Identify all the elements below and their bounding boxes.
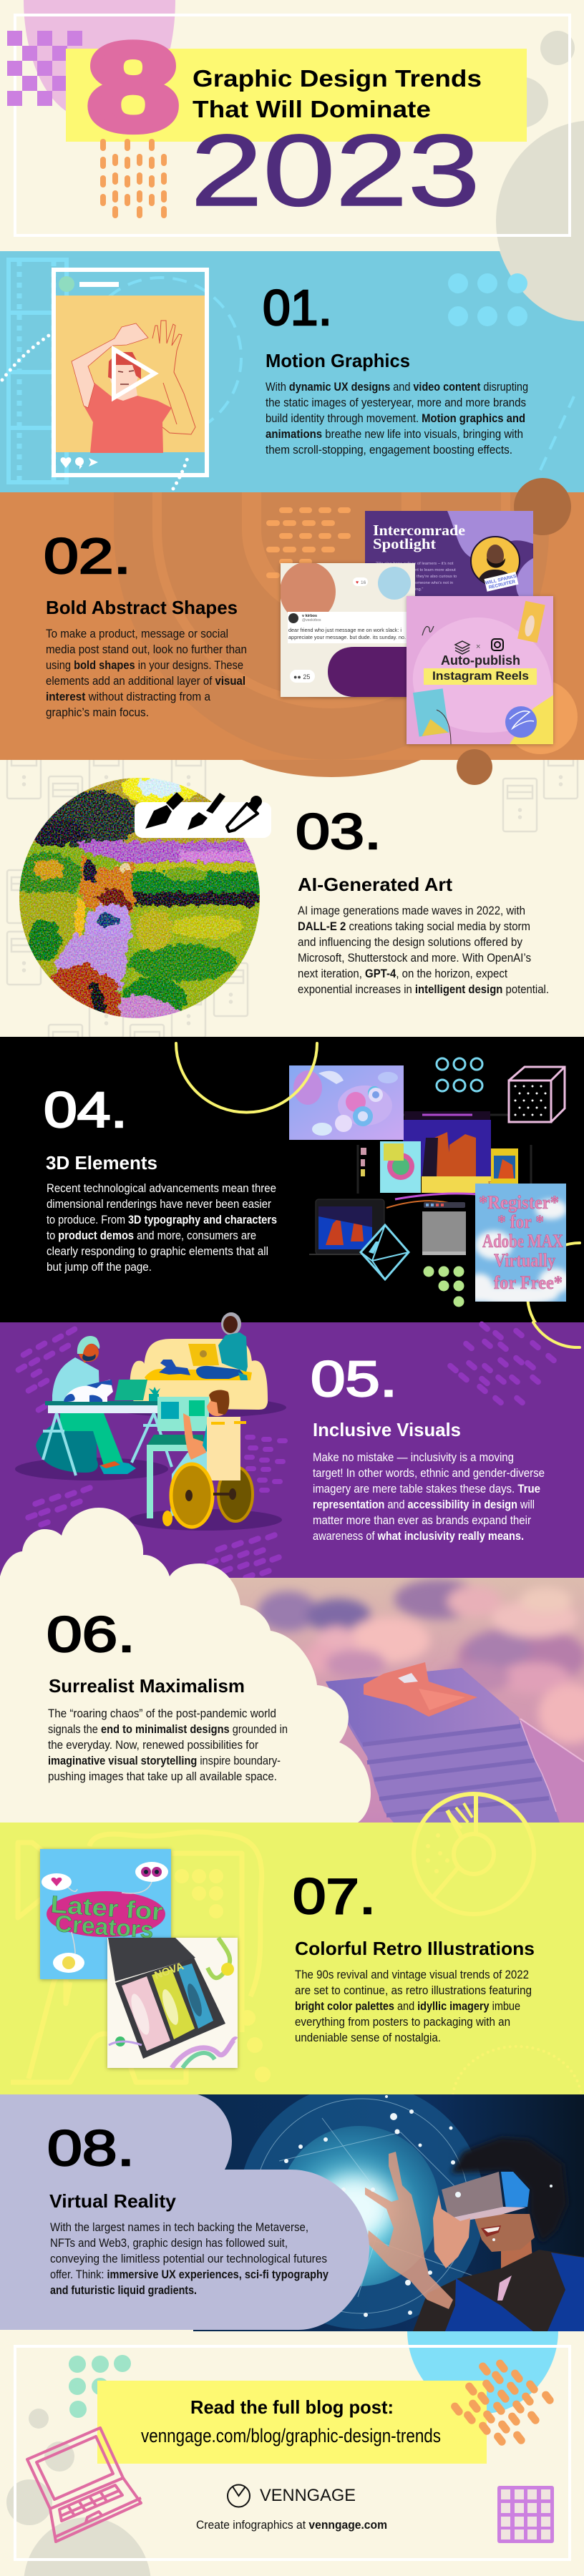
- portrait: [471, 537, 520, 592]
- orange dashes: [449, 2358, 555, 2447]
- body text: NFTs and Web3, graphic design has followed suit,: [50, 2236, 288, 2250]
- body text: graphic’s main focus.: [46, 706, 149, 719]
- yellow band: [97, 2381, 487, 2464]
- body text: animations breathe new life into visuals, bringing with: [266, 427, 523, 441]
- pink meadow band: [79, 841, 265, 866]
- headset: [442, 2172, 503, 2218]
- body text: clearly responding to graphic elements that all: [47, 1244, 268, 1258]
- laptop: [309, 1199, 395, 1254]
- body text: the static images of yesteryear, more and more brands: [266, 396, 526, 409]
- body text: to produce. From 3D typography and characters: [47, 1213, 277, 1226]
- big number 8: 8: [87, 18, 179, 156]
- face and neck: [501, 2240, 533, 2279]
- orange dash pattern: [100, 139, 167, 218]
- title: That Will Dominate: [193, 96, 431, 122]
- poster: Register for Adobe MAX: Adobe MAX: [482, 1231, 563, 1252]
- panel: 04 3D elements: [0, 1037, 584, 1347]
- retro background outlines: [11, 1832, 262, 2082]
- heading: AI-Generated Art: [298, 874, 452, 895]
- green laptop: [115, 1380, 147, 1400]
- icon: pen nib: [145, 792, 184, 829]
- body text: everything from posters to packaging with an: [295, 2015, 510, 2029]
- body text: imagery are mere table stakes these days. True: [313, 1482, 540, 1496]
- number: 02.: [44, 528, 131, 584]
- dotted arc: [453, 2046, 581, 2094]
- body text: next iteration, GPT-4, on the horizon, expect: [298, 967, 507, 980]
- number: 04.: [44, 1082, 127, 1138]
- card: tweet post: [280, 562, 415, 697]
- monitor: [157, 1397, 209, 1439]
- body text: Make no mistake — inclusivity is a moving: [313, 1450, 514, 1464]
- poster: cosmetics box: NOVA: [153, 1960, 185, 1982]
- raised hands: [365, 2152, 470, 2309]
- wire diamond: [361, 1225, 409, 1279]
- body text: AI image generations made waves in 2022, with: [298, 904, 525, 917]
- icon: purple grid: [497, 2486, 554, 2543]
- card: tweet post: ●● 25: [293, 673, 310, 680]
- plant: [149, 1387, 160, 1401]
- body text: [46, 627, 247, 719]
- body text: target! In other words, ethnic and gender-diverse: [313, 1466, 545, 1480]
- white frame: [15, 2346, 570, 2560]
- poster: Register for Adobe MAX: for Free*: [494, 1272, 563, 1293]
- body text: media post stand out, look no further than: [46, 643, 247, 656]
- card: Auto-publish Instagram Reels: ×: [476, 643, 480, 651]
- card: tweet post: appreciate your message. but dude. its sunday. no.: [288, 634, 406, 640]
- panel: 01 motion graphics: [0, 251, 584, 493]
- desk: [43, 1401, 172, 1475]
- heading: Colorful Retro Illustrations: [295, 1938, 535, 1959]
- mint dots: [69, 2355, 131, 2418]
- body text: matter more than ever as brands expand their: [313, 1513, 531, 1527]
- body text: and futuristic liquid gradients.: [50, 2283, 197, 2297]
- card: Intercomrade Spotlight: omeone who’s not in: [415, 581, 453, 585]
- number: 07.: [293, 1868, 376, 1924]
- year 2023: 2023: [190, 114, 480, 228]
- checker pattern: [7, 31, 82, 106]
- title: Graphic Design Trends: [193, 65, 482, 92]
- card: Intercomrade Spotlight: [365, 511, 533, 596]
- number: 08.: [47, 2120, 135, 2176]
- brown circles: [457, 478, 571, 785]
- body text: Microsoft, Shutterstock and more. With OpenAI’s: [298, 951, 531, 965]
- wheelchair person: [162, 1390, 253, 1527]
- network dots: [284, 2095, 553, 2317]
- body text: are set to continue, as retro illustrations featuring: [295, 1984, 532, 1997]
- card: Intercomrade Spotlight: ing.”: [415, 587, 423, 592]
- green dots: [424, 1267, 464, 1307]
- post action icons: [61, 457, 98, 469]
- body text: exponential increases in intelligent design potential.: [298, 982, 549, 996]
- card: Intercomrade Spotlight: “We also hope culture of learners – it’s not: [376, 562, 454, 566]
- dog: [159, 1360, 190, 1375]
- body text: build identity through movement. Motion graphics and: [266, 411, 525, 425]
- illustrated man: [72, 321, 195, 453]
- concentric rings: [114, 492, 549, 777]
- stacked bed steps: [521, 1720, 584, 1796]
- panel: 08 virtual reality: [0, 2083, 584, 2331]
- orange dashes: [266, 507, 351, 578]
- woman hair: [451, 2137, 568, 2243]
- white frame: [15, 15, 570, 235]
- body text: DALL-E 2 creations taking social media by storm: [298, 919, 530, 933]
- lower grass: [128, 903, 259, 1010]
- left foliage: [19, 850, 82, 894]
- body text: representation and accessibility in design will: [313, 1498, 535, 1511]
- panel: 06 surrealist maximalism: [0, 1508, 584, 1823]
- heading: Surrealist Maximalism: [49, 1675, 245, 1697]
- heading: Virtual Reality: [49, 2190, 177, 2212]
- portrait: RECRUITER: [488, 580, 516, 590]
- heading: Motion Graphics: [266, 350, 410, 371]
- number: 03.: [296, 804, 381, 859]
- retro dots: [175, 1869, 271, 2082]
- body text: elements add an additional layer of visual: [46, 674, 245, 688]
- poster: Later for Creators: [40, 1849, 171, 1979]
- card: tweet post: ♥: [356, 580, 359, 585]
- body text: [313, 1450, 545, 1543]
- pink semicircle: [24, 0, 175, 122]
- monitor composite: EMERGING: [488, 1180, 517, 1186]
- purple dash patterns: [14, 1320, 558, 1581]
- body text: imaginative visual storytelling inspire boundary-: [48, 1754, 281, 1767]
- lilac text shape: [0, 2094, 369, 2330]
- avatar: [59, 276, 74, 292]
- cat: [64, 1380, 113, 1402]
- 3D image: [289, 1065, 404, 1140]
- tool icons card: [135, 792, 271, 838]
- illustration: remote workers: [15, 1312, 286, 1531]
- body text: pushing images that take up all available space.: [48, 1770, 277, 1783]
- poster: Later for Creators: Creators: [54, 1910, 155, 1943]
- pink bed: [364, 1662, 477, 1717]
- body text: [298, 904, 549, 996]
- card: Intercomrade Spotlight: they’re also curious to: [417, 575, 457, 579]
- fox: [79, 855, 136, 916]
- wire cube: [509, 1067, 565, 1122]
- cloud shape: [0, 1508, 371, 1823]
- body text: using bold shapes in your designs. These: [46, 658, 243, 672]
- call to action: [141, 2396, 441, 2446]
- sofa person: [188, 1312, 248, 1380]
- exercise ball: [36, 1415, 98, 1473]
- blue semicircle: [407, 2331, 558, 2414]
- card: tweet post: v kirbos: [302, 614, 317, 618]
- dotted lines: [2, 336, 188, 489]
- dots: [448, 273, 527, 326]
- small desk: [147, 1435, 203, 1518]
- body text: and influencing the design solutions offered by: [298, 935, 522, 949]
- body text: [266, 380, 528, 457]
- light orange circle: [503, 680, 578, 754]
- card: tweet post: 16: [361, 580, 366, 585]
- yellow title band: [66, 49, 527, 142]
- yellow arc: [176, 1043, 317, 1112]
- big cream circle corner: [500, 251, 584, 321]
- grey background ellipses: [491, 31, 584, 322]
- title: [193, 65, 482, 122]
- frame: [54, 270, 207, 475]
- dark band: [134, 892, 259, 905]
- body text: The “roaring chaos” of the post-pandemic world: [48, 1707, 276, 1720]
- body text: them scroll-stopping, engagement boosting effects.: [266, 443, 512, 457]
- poster: Later for Creators: Later for: [49, 1891, 164, 1926]
- number: 06.: [47, 1606, 135, 1662]
- grey circles: [6, 2409, 151, 2576]
- body text: signals the end to minimalist designs grounded in: [48, 1722, 288, 1736]
- credit: Create infographics at venngage.com: [196, 2518, 387, 2532]
- icon: dropper: [227, 796, 262, 831]
- yellow arc right: [527, 1243, 580, 1347]
- body text: conveying the limitless potential our technological futures: [50, 2252, 327, 2265]
- body text: [295, 1968, 532, 2044]
- film strip: [9, 260, 67, 482]
- poster: Register for Adobe MAX: [475, 1184, 566, 1302]
- panel: 03 AI-generated art: [6, 760, 578, 1037]
- icon: brush: [188, 793, 225, 830]
- body text: offer. Think: immersive UX experiences, sci-fi typography: [50, 2268, 328, 2281]
- monitor composite: [358, 1111, 531, 1255]
- card: tweet post: @veekirbos: [302, 618, 321, 623]
- number: 05.: [311, 1351, 397, 1407]
- call to action: venngage.com/blog/graphic-design-trends: [141, 2425, 441, 2446]
- panel: 05 inclusive visuals: [0, 1312, 584, 1581]
- sofa: [130, 1339, 268, 1410]
- number: 01.: [263, 280, 332, 336]
- body text: Recent technological advancements mean three: [47, 1181, 276, 1195]
- card: Intercomrade Spotlight: Spotlight: [373, 535, 436, 552]
- body text: [48, 1707, 288, 1783]
- body text: With the largest names in tech backing the Metaverse,: [50, 2220, 308, 2234]
- upper right grass: [131, 862, 265, 874]
- Venngage logo: [228, 2484, 356, 2507]
- panel: 07 colorful retro illustrations: [0, 1794, 584, 2094]
- floor shadows: [15, 1397, 286, 1531]
- icon: pink laptop: [27, 2428, 141, 2542]
- poster: cosmetics box: [107, 1938, 238, 2068]
- surreal photo: [215, 1578, 584, 1823]
- poster: Register for Adobe MAX: *Register*: [479, 1192, 559, 1213]
- desk man: [52, 1336, 136, 1474]
- play icon: [114, 349, 155, 398]
- VR photo: [193, 2083, 584, 2331]
- card: Auto-publish Instagram Reels: Instagram Reels: [432, 669, 529, 683]
- body text: To make a product, message or social: [46, 627, 228, 640]
- card: tweet post: dear friend who just message me on work slack: i: [288, 627, 402, 633]
- heading: Bold Abstract Shapes: [46, 597, 238, 618]
- heading: Inclusive Visuals: [313, 1419, 461, 1440]
- body text: awareness of what inclusivity really means.: [313, 1529, 524, 1543]
- card: Intercomrade Spotlight: nt to learn more about: [415, 568, 456, 572]
- card: Intercomrade Spotlight: Intercomrade: [373, 522, 465, 539]
- panel: footer: [0, 2331, 584, 2576]
- CD icon: [414, 1794, 534, 1914]
- heading: 3D Elements: [46, 1152, 157, 1174]
- social post illustration: [54, 270, 207, 475]
- body text: interest without distracting from a: [46, 690, 210, 703]
- body text: The 90s revival and vintage visual trends of 2022: [295, 1968, 529, 1981]
- body text: to product demos and more, consumers are: [47, 1229, 256, 1242]
- panel: 02 bold abstract shapes: [0, 478, 584, 785]
- painted fox image: [19, 778, 260, 1018]
- portrait: WILL SPARKS: [485, 574, 517, 586]
- dashed circle: [81, 278, 574, 470]
- blue ring dots: [437, 1058, 482, 1091]
- body text: dimensional renderings have never been easier: [47, 1197, 271, 1211]
- computer tower pattern: [7, 746, 578, 1078]
- Venngage logo: VENNGAGE: [260, 2486, 356, 2505]
- poster: Register for Adobe MAX: Virtually: [494, 1250, 555, 1271]
- body text: [47, 1181, 277, 1274]
- yellow arc lower: [533, 1322, 580, 1347]
- sky and hill: [31, 779, 246, 846]
- call to action: Read the full blog post:: [190, 2396, 394, 2418]
- body text: undeniable sense of nostalgia.: [295, 2031, 441, 2044]
- panel: header: [0, 0, 584, 322]
- jacket: [413, 2250, 584, 2331]
- card: Auto-publish Instagram Reels: [407, 596, 555, 744]
- body text: the everyday. Now, renewed possibilities for: [48, 1738, 258, 1752]
- poster: Register for Adobe MAX: * for *: [497, 1211, 544, 1232]
- body text: [50, 2220, 328, 2297]
- card: Auto-publish Instagram Reels: Auto-publish: [441, 653, 520, 668]
- body text: but jump off the page.: [47, 1260, 152, 1274]
- body text: bright color palettes and idyllic imagery imbue: [295, 1999, 520, 2013]
- body text: With dynamic UX designs and video content disrupting: [266, 380, 528, 394]
